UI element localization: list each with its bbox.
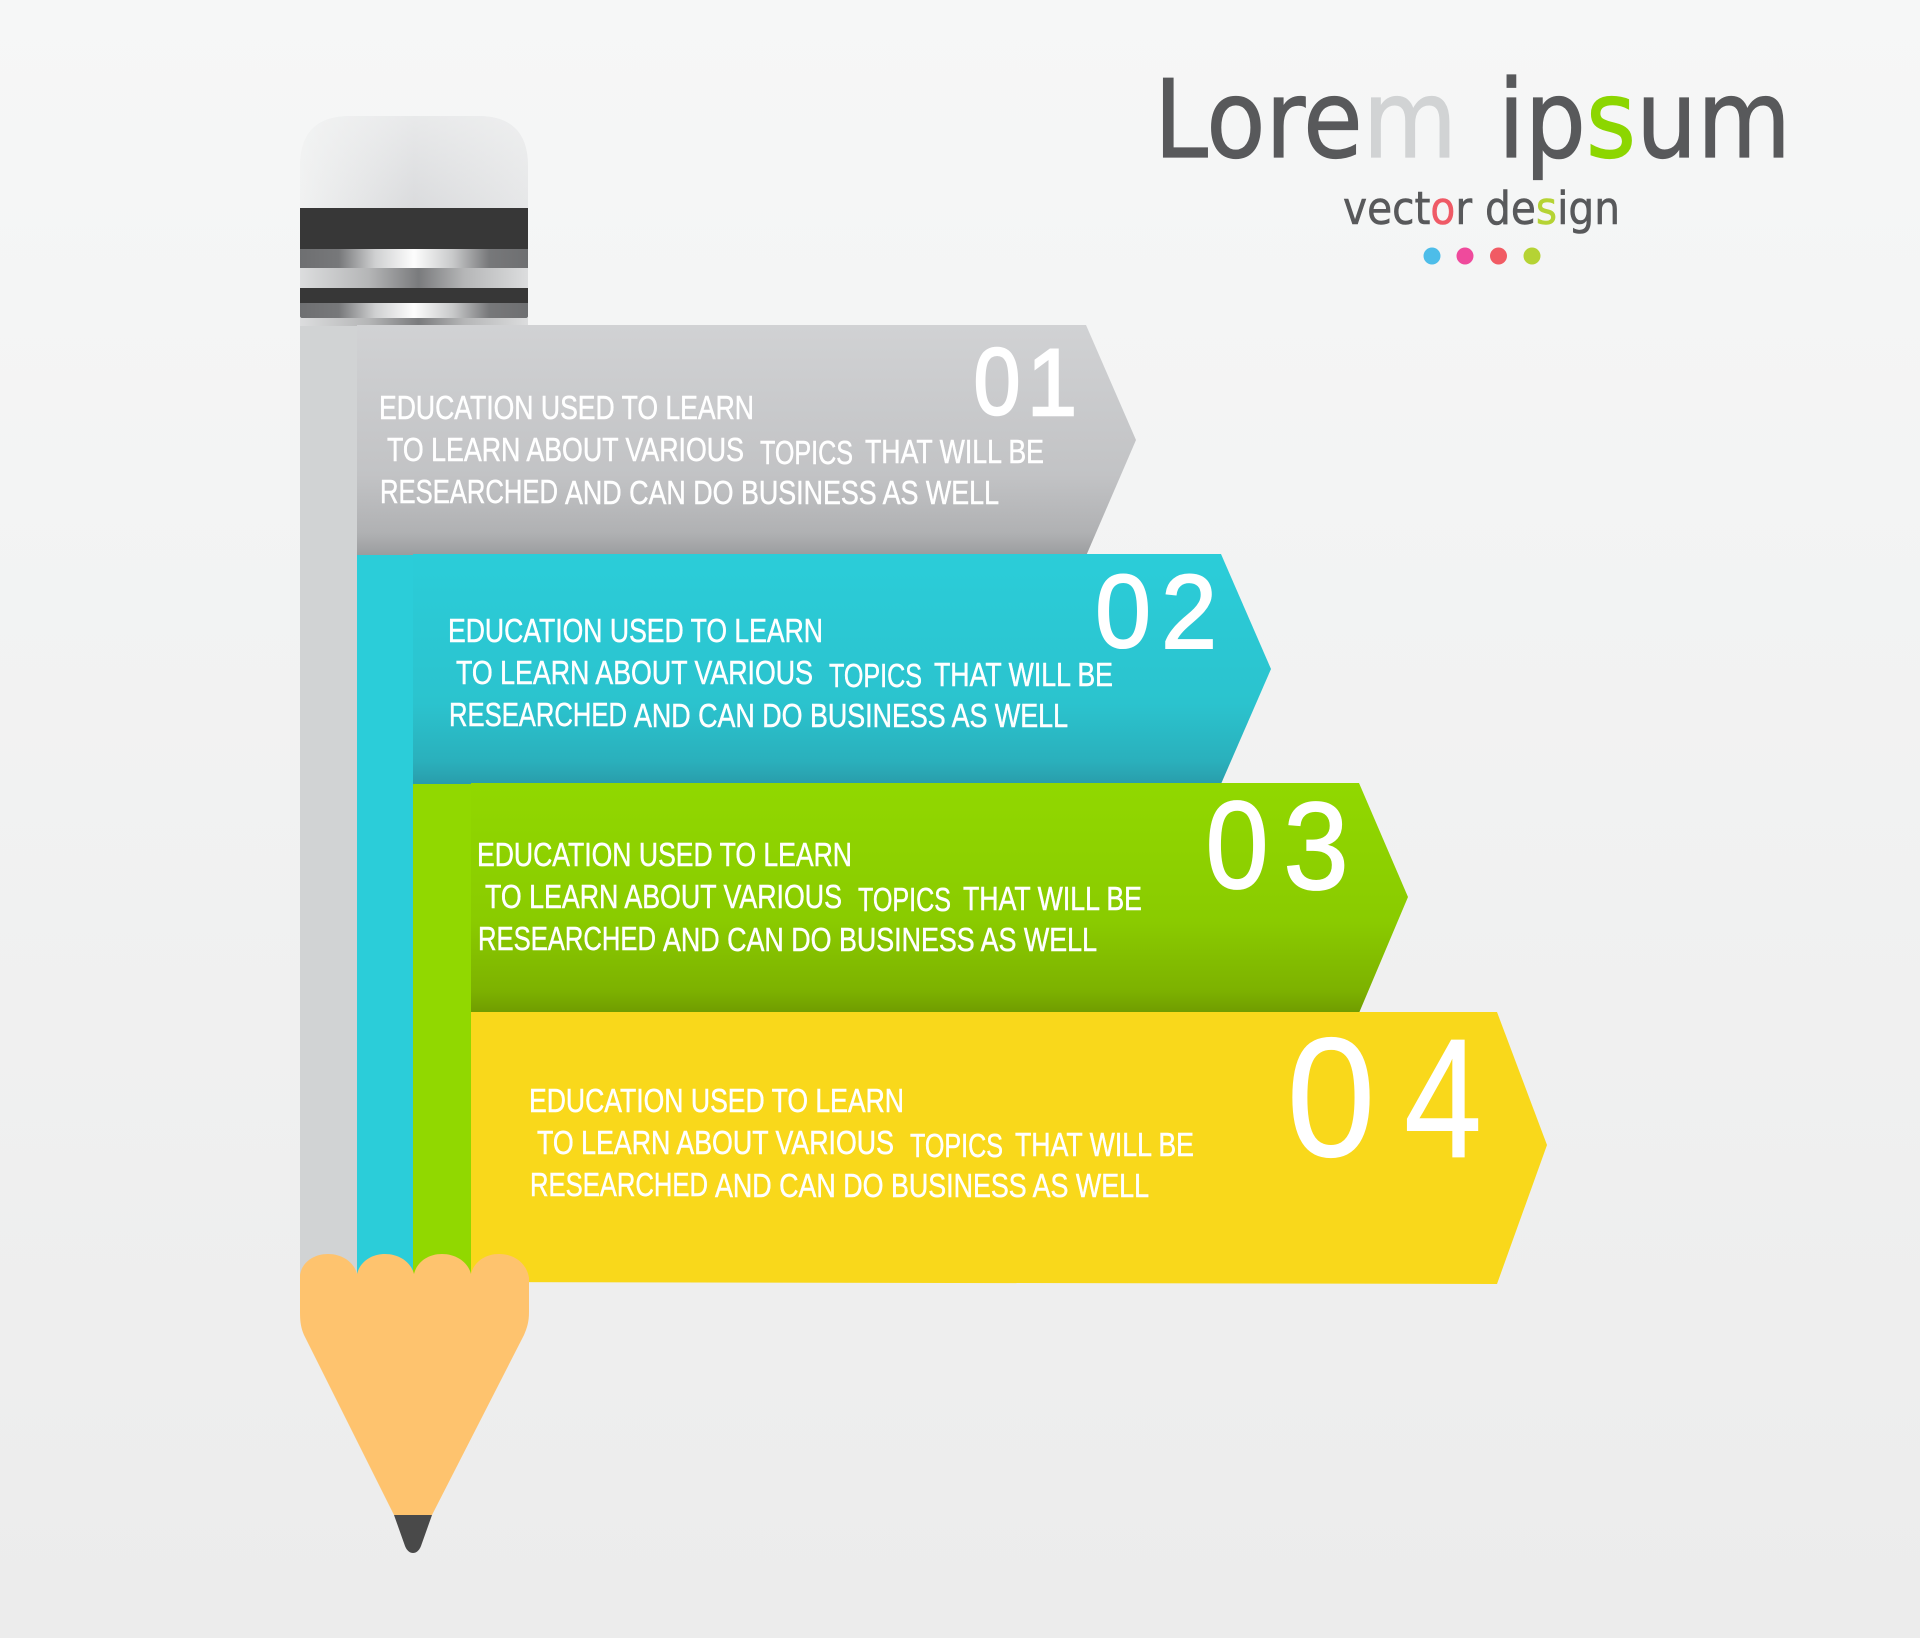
banner 02: cyan arrow: [357, 553, 1271, 1285]
banner 01: grey arrow: [357, 325, 1136, 556]
banner 02 number: 0: [1095, 553, 1151, 669]
banner 02 description: THAT WILL BE: [934, 656, 1113, 693]
banner 01 description: AND CAN DO BUSINESS AS WELL: [565, 474, 999, 511]
banner 03 description: [477, 836, 1142, 958]
banner 03 description: EDUCATION USED TO LEARN: [477, 836, 852, 873]
banner 03 number: 0: [1206, 777, 1268, 915]
title: ipsum: [1498, 58, 1791, 183]
title: Lorem: [1154, 58, 1457, 183]
banner 01 number: 1: [1027, 329, 1077, 436]
banner 04 description: TO LEARN ABOUT VARIOUS: [537, 1124, 894, 1161]
banner 03: green arrow: [413, 777, 1408, 1284]
banner 02 description: AND CAN DO BUSINESS AS WELL: [634, 697, 1068, 734]
banner 02 description: TOPICS: [829, 657, 922, 694]
banner 04 description: THAT WILL BE: [1015, 1126, 1194, 1163]
banner 01 description: EDUCATION USED TO LEARN: [379, 389, 754, 426]
banner 04 description: RESEARCHED: [530, 1166, 708, 1203]
banner 03 description: TOPICS: [858, 881, 951, 918]
banner 04: yellow arrow: [471, 1003, 1547, 1284]
banner 01 description: TO LEARN ABOUT VARIOUS: [387, 431, 744, 468]
pencil tip: wood and graphite: [300, 1254, 529, 1553]
banner 04 description: TOPICS: [910, 1127, 1003, 1164]
banner 04 description: AND CAN DO BUSINESS AS WELL: [715, 1167, 1149, 1204]
banner 02 description: EDUCATION USED TO LEARN: [448, 612, 823, 649]
banner 01 number: 0: [974, 329, 1020, 435]
pencil eraser and metal ferrule: [300, 116, 528, 326]
banner 01 number: [974, 329, 1077, 436]
decorative colour dots: [1424, 248, 1540, 264]
banner 03 description: AND CAN DO BUSINESS AS WELL: [663, 921, 1097, 958]
banner 04 number: 4: [1404, 1003, 1482, 1193]
banner 03 description: RESEARCHED: [478, 920, 656, 957]
banner 03 description: TO LEARN ABOUT VARIOUS: [485, 878, 842, 915]
banner 03 description: THAT WILL BE: [963, 880, 1142, 917]
banner 01 description: RESEARCHED: [380, 473, 558, 510]
title: [1154, 58, 1791, 183]
banner 02 description: [448, 612, 1113, 734]
banner 03 number: 3: [1283, 777, 1349, 916]
banner 02 number: 2: [1161, 553, 1217, 671]
banner 04 description: [529, 1082, 1194, 1204]
banner 02 description: TO LEARN ABOUT VARIOUS: [456, 654, 813, 691]
banner 02 description: RESEARCHED: [449, 696, 627, 733]
banner 02 number: [1095, 553, 1217, 671]
banner 01 description: [379, 389, 1044, 511]
banner 01 description: THAT WILL BE: [865, 433, 1044, 470]
pencil body strip: grey: [300, 325, 357, 1285]
banner 04 number: [1287, 1003, 1482, 1193]
banner 03 number: [1206, 777, 1349, 916]
banner 04 description: EDUCATION USED TO LEARN: [529, 1082, 904, 1119]
banner 04 number: 0: [1287, 1003, 1375, 1192]
subtitle: vector design: [1343, 182, 1620, 235]
banner 01 description: TOPICS: [760, 434, 853, 471]
